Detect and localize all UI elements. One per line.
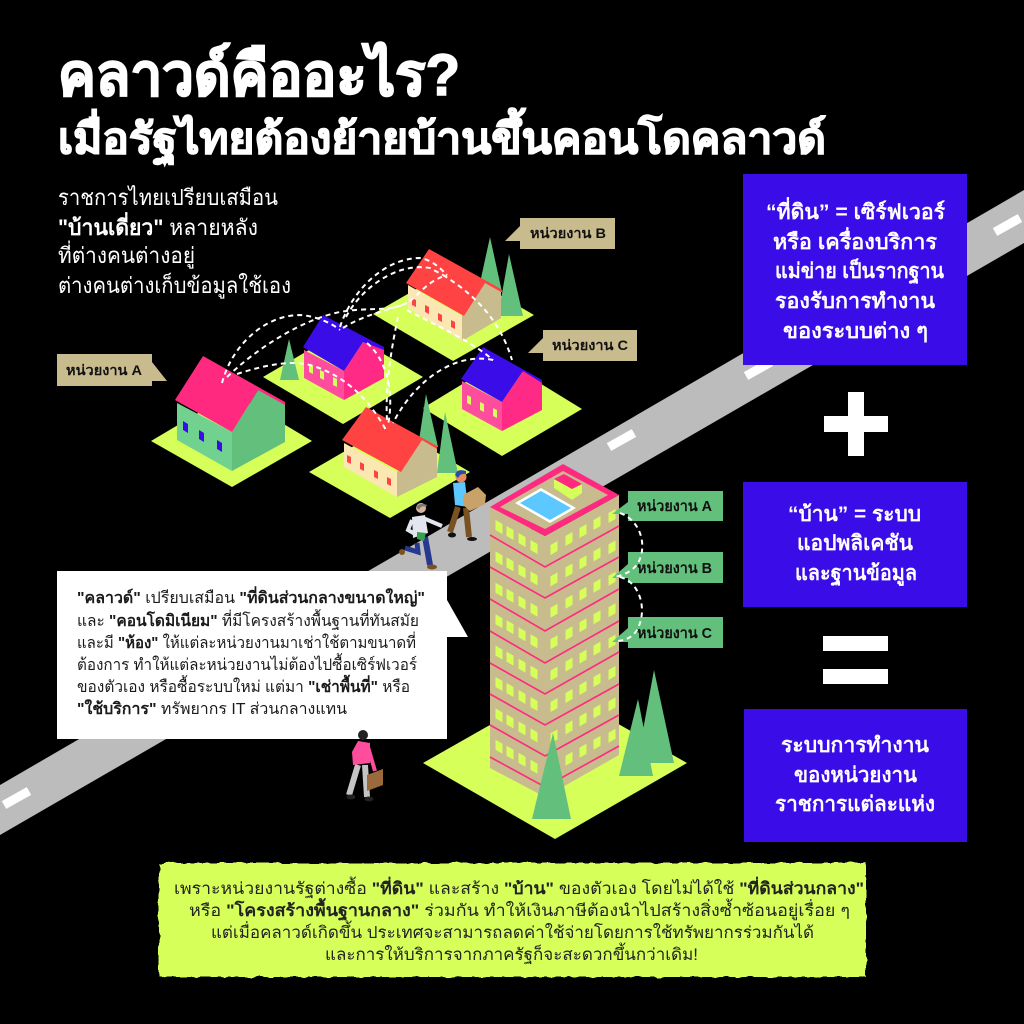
person running <box>399 503 442 570</box>
roof <box>490 464 619 536</box>
panel: house = app <box>743 482 967 607</box>
panel: work system: ราชการแต่ละแห่ง <box>775 793 935 816</box>
intro text: "บ้านเดี่ยว" หลายหลัง <box>58 211 258 240</box>
intro text: ที่ต่างคนต่างอยู่ <box>58 240 195 269</box>
panel: land = server: ของระบบต่าง ๆ <box>783 320 928 343</box>
panel: land = server: หรือ เครื่องบริการ <box>773 226 938 254</box>
person with briefcase <box>346 730 383 802</box>
tree: behind right large <box>637 670 674 763</box>
person with box <box>448 470 486 541</box>
label: building B <box>612 552 723 583</box>
panel: conclusion: และการให้บริการจากภาครัฐก็จะสะดวกขึ้นกว่าเดิม! <box>325 942 698 964</box>
callout: cloud explanation: และ "คอนโดมิเนียม" ที่มีโครงสร้างพื้นฐานที่ทันสมัย <box>77 609 419 630</box>
icon: plus <box>824 392 888 456</box>
panel: work system: ของหน่วยงาน <box>794 764 918 787</box>
intro text <box>58 185 291 299</box>
house: red roof top <box>373 237 534 361</box>
tree: front <box>532 733 571 819</box>
panel: conclusion: แต่เมื่อคลาวด์เกิดขึ้น ประเทศจะสามารถลดค่าใช้จ่ายโดยการใช้ทรัพยากรร่วมกันได้ <box>211 920 814 942</box>
road <box>0 190 1024 835</box>
windows <box>496 509 616 775</box>
panel: conclusion: เพราะหน่วยงานรัฐต่างซื้อ "ที่ดิน" และสร้าง "บ้าน" ของตัวเอง โดยไม่ได้ใช้ "ที่ดินส่วนกลาง" <box>174 876 864 898</box>
house: blue roof right <box>423 347 582 456</box>
subtitle: เมื่อรัฐไทยต้องย้ายบ้านขึ้นคอนโดคลาวด์ <box>58 107 826 166</box>
callout: cloud explanation: และมี "ห้อง" ให้แต่ละหน่วยงานมาเช่าใช้ตามขนาดที่ <box>77 631 416 652</box>
label: building B: หน่วยงาน B <box>637 560 712 577</box>
label: หน่วยงาน B: หน่วยงาน B <box>530 225 606 241</box>
panel: work system <box>744 709 967 842</box>
panel: house = app: และฐานข้อมูล <box>795 561 917 587</box>
panel: land = server: รองรับการทำงาน <box>775 290 936 313</box>
house: red roof bottom <box>309 394 470 518</box>
callout: cloud explanation <box>57 571 468 739</box>
callout: cloud explanation: "คลาวด์" เปรียบเสมือน "ที่ดินส่วนกลางขนาดใหญ่" <box>77 586 425 608</box>
house: blue roof centre <box>263 315 423 424</box>
panel: house = app: แอปพลิเคชัน <box>797 532 914 555</box>
dashed links between building labels <box>613 513 642 641</box>
label: building C <box>612 617 723 648</box>
label: หน่วยงาน C <box>528 330 637 361</box>
panel: conclusion <box>159 863 866 977</box>
label: หน่วยงาน C: หน่วยงาน C <box>552 337 628 353</box>
house A <box>151 356 312 487</box>
intro text: ต่างคนต่างเก็บข้อมูลใช้เอง <box>58 271 291 299</box>
title: คลาวด์คืออะไร? <box>58 42 460 108</box>
panel: land = server <box>743 174 967 365</box>
label: building C: หน่วยงาน C <box>637 625 712 642</box>
dashed connections between houses <box>222 258 512 432</box>
condominium building <box>423 464 687 839</box>
label: หน่วยงาน B <box>505 218 615 249</box>
label: building A: หน่วยงาน A <box>637 498 712 515</box>
tree: behind right small <box>619 699 653 776</box>
icon: equals <box>823 636 888 684</box>
callout: cloud explanation: ต้องการ ทำให้แต่ละหน่วยงานไม่ต้องไปซื้อเซิร์ฟเวอร์ <box>77 653 417 674</box>
tower walls <box>490 495 619 797</box>
callout: cloud explanation: ของตัวเอง หรือซื้อระบบใหม่ แต่มา "เช่าพื้นที่" หรือ <box>77 674 410 696</box>
panel: land = server: “ที่ดิน” = เซิร์ฟเวอร์ <box>766 196 946 224</box>
label: หน่วยงาน A <box>57 354 167 386</box>
panel: land = server: แม่ข่าย เป็นรากฐาน <box>775 257 945 285</box>
label: หน่วยงาน A: หน่วยงาน A <box>66 362 142 378</box>
panel: house = app: “บ้าน” = ระบบ <box>788 502 921 526</box>
intro text: ราชการไทยเปรียบเสมือน <box>58 185 278 210</box>
panel: conclusion: หรือ "โครงสร้างพื้นฐานกลาง" ร่วมกัน ทำให้เงินภาษีต้องนำไปสร้างสิ่งซ้ำซ้อนอยู่เรื่อย ๆ <box>189 898 850 921</box>
label: building A <box>612 491 723 521</box>
floor lines <box>490 526 619 787</box>
callout: cloud explanation: "ใช้บริการ" ทรัพยากร IT ส่วนกลางแทน <box>77 699 347 718</box>
panel: work system: ระบบการทำงาน <box>781 734 930 757</box>
